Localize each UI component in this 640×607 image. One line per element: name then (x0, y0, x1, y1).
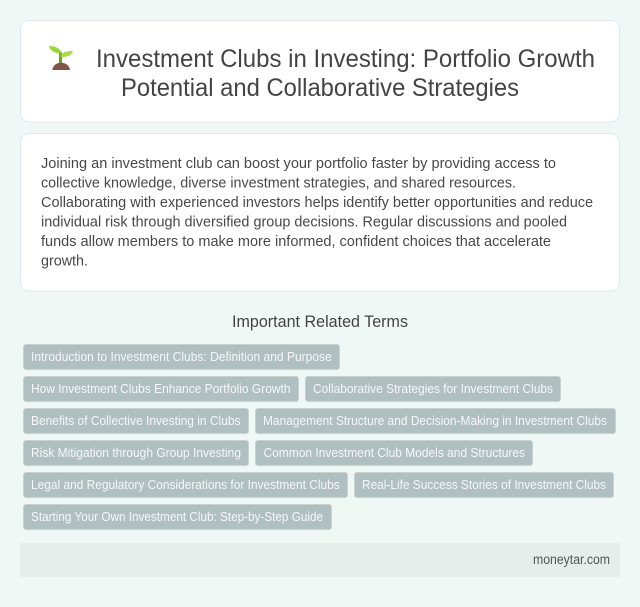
text block: summary: individual risk through diversified group decisions. Regular discussions and pooled (41, 214, 567, 230)
tag: Legal and Regulatory Considerations for Investment Clubs (31, 477, 340, 492)
tag: Benefits of Collective Investing in Clubs (31, 413, 241, 428)
tag (24, 344, 340, 370)
tag: Management Structure and Decision-Making in Investment Clubs (263, 413, 607, 428)
tag (306, 376, 560, 402)
tag: Common Investment Club Models and Structures (264, 445, 525, 460)
text block: summary: Collaborating with experienced investors helps identify better opportunities and reduce (41, 194, 593, 211)
tag (24, 408, 248, 434)
title (96, 45, 595, 102)
footer brand: moneytar.com (533, 552, 610, 567)
heading: related terms: Important Related Terms (232, 313, 408, 331)
title: Potential and Collaborative Strategies (121, 74, 519, 102)
tag (354, 472, 614, 498)
text block: summary: Joining an investment club can boost your portfolio faster by providing access to (41, 155, 556, 172)
tag (24, 472, 348, 498)
panel: summary text (20, 134, 620, 291)
text block: summary: collective knowledge, diverse investment strategies, and shared resources. (41, 174, 516, 192)
text block: summary: growth. (41, 252, 88, 270)
icon: seedling (49, 46, 73, 70)
title: Investment Clubs in Investing: Portfolio Growth (96, 45, 595, 73)
text block: summary: funds allow members to make more informed, confident choices that accelerate (41, 233, 551, 250)
footer (20, 543, 620, 577)
tag: Collaborative Strategies for Investment Clubs (313, 381, 553, 396)
panel: related term tags (24, 344, 616, 530)
tag: Real-Life Success Stories of Investment Clubs (362, 477, 606, 492)
text block: summary (41, 155, 593, 270)
tag (24, 376, 298, 402)
tag: Risk Mitigation through Group Investing (31, 445, 241, 460)
tag (24, 440, 248, 466)
tag: Starting Your Own Investment Club: Step-by-Step Guide (31, 509, 323, 524)
panel: header (20, 20, 620, 122)
tag (256, 408, 616, 434)
tag (24, 504, 332, 530)
tag (256, 440, 532, 466)
tag: How Investment Clubs Enhance Portfolio Growth (31, 381, 290, 396)
tag: Introduction to Investment Clubs: Definition and Purpose (31, 349, 332, 364)
